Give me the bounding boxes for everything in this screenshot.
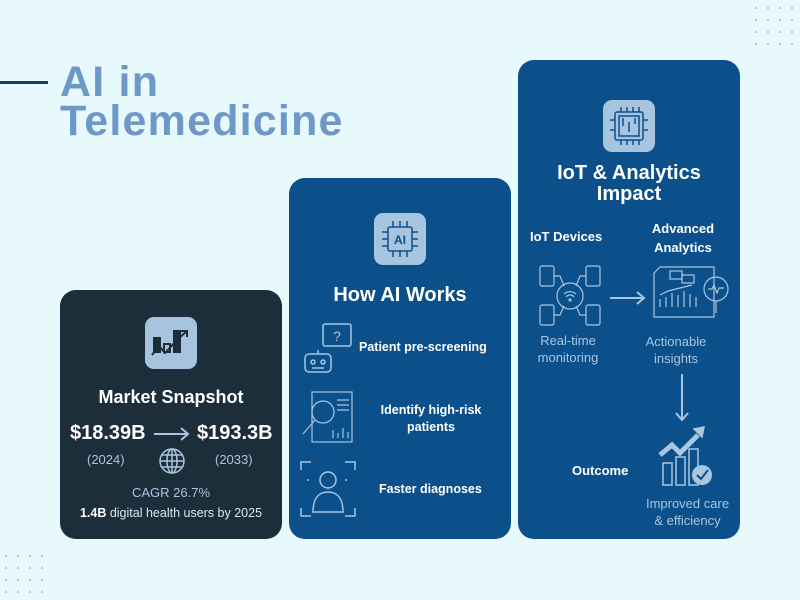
stats: CAGR 26.7%: [132, 485, 210, 500]
label: IoT devices: IoT Devices: [530, 229, 602, 244]
icon: robot: [304, 323, 352, 373]
caption: real-time monitoring: Real-time monitoring: [538, 333, 598, 365]
heading: Market Snapshot: [98, 387, 244, 407]
panel: IoT & analytics: [518, 60, 740, 539]
icon: globe: [159, 448, 185, 474]
label: outcome: Outcome: [572, 463, 628, 478]
icon: robot: ?: [333, 328, 341, 344]
panel: market snapshot: (2024): [87, 452, 125, 467]
panel: market snapshot: (2033): [215, 452, 253, 467]
heading: Impact: [597, 183, 661, 205]
item: pre-screening: [304, 323, 487, 373]
arrow right: [610, 291, 646, 305]
arrow down: [675, 374, 689, 422]
panel: how AI works: [289, 178, 511, 539]
title: [60, 58, 344, 145]
decorative dots bottom left: [4, 554, 44, 594]
icon: analytics report: [653, 266, 729, 318]
icon: improved chart: [658, 426, 712, 486]
heading: [557, 162, 701, 205]
panel: market snapshot: [60, 290, 282, 539]
icon: connected devices: [539, 265, 601, 326]
icon: face scan: [300, 461, 356, 517]
caption: improved care: Improved care: [646, 496, 729, 511]
panel: market snapshot: 1.4B digital health users by 2025: [80, 506, 262, 520]
caption: improved care: [646, 496, 729, 528]
item: faster diagnoses: [300, 461, 482, 517]
icon: magnifier report: [302, 391, 353, 443]
panel: market snapshot: $193.3B: [197, 422, 273, 444]
icon: growth chart: [145, 317, 197, 369]
market values: $18.39B: [70, 422, 146, 444]
title accent line: [0, 81, 48, 84]
title: AI in: [60, 58, 159, 106]
item: high-risk: Identify high-risk patients: [381, 403, 481, 434]
icon: AI chip: AI: [394, 233, 406, 247]
icon: AI chip: [374, 213, 426, 265]
caption: actionable insights: Actionable insights: [646, 334, 706, 366]
title: Telemedicine: [60, 97, 344, 145]
arrow: [154, 427, 190, 441]
label: advanced analytics: Advanced Analytics: [652, 221, 714, 255]
decorative dots top right: [754, 6, 794, 46]
heading: IoT & Analytics: [557, 162, 701, 184]
item: high-risk: [302, 391, 482, 443]
icon: circuit chip: [603, 100, 655, 152]
caption: improved care: & efficiency: [654, 513, 721, 528]
item: pre-screening: Patient pre-screening: [359, 340, 487, 354]
heading: How AI Works: [333, 284, 467, 306]
item: faster diagnoses: Faster diagnoses: [379, 482, 482, 496]
